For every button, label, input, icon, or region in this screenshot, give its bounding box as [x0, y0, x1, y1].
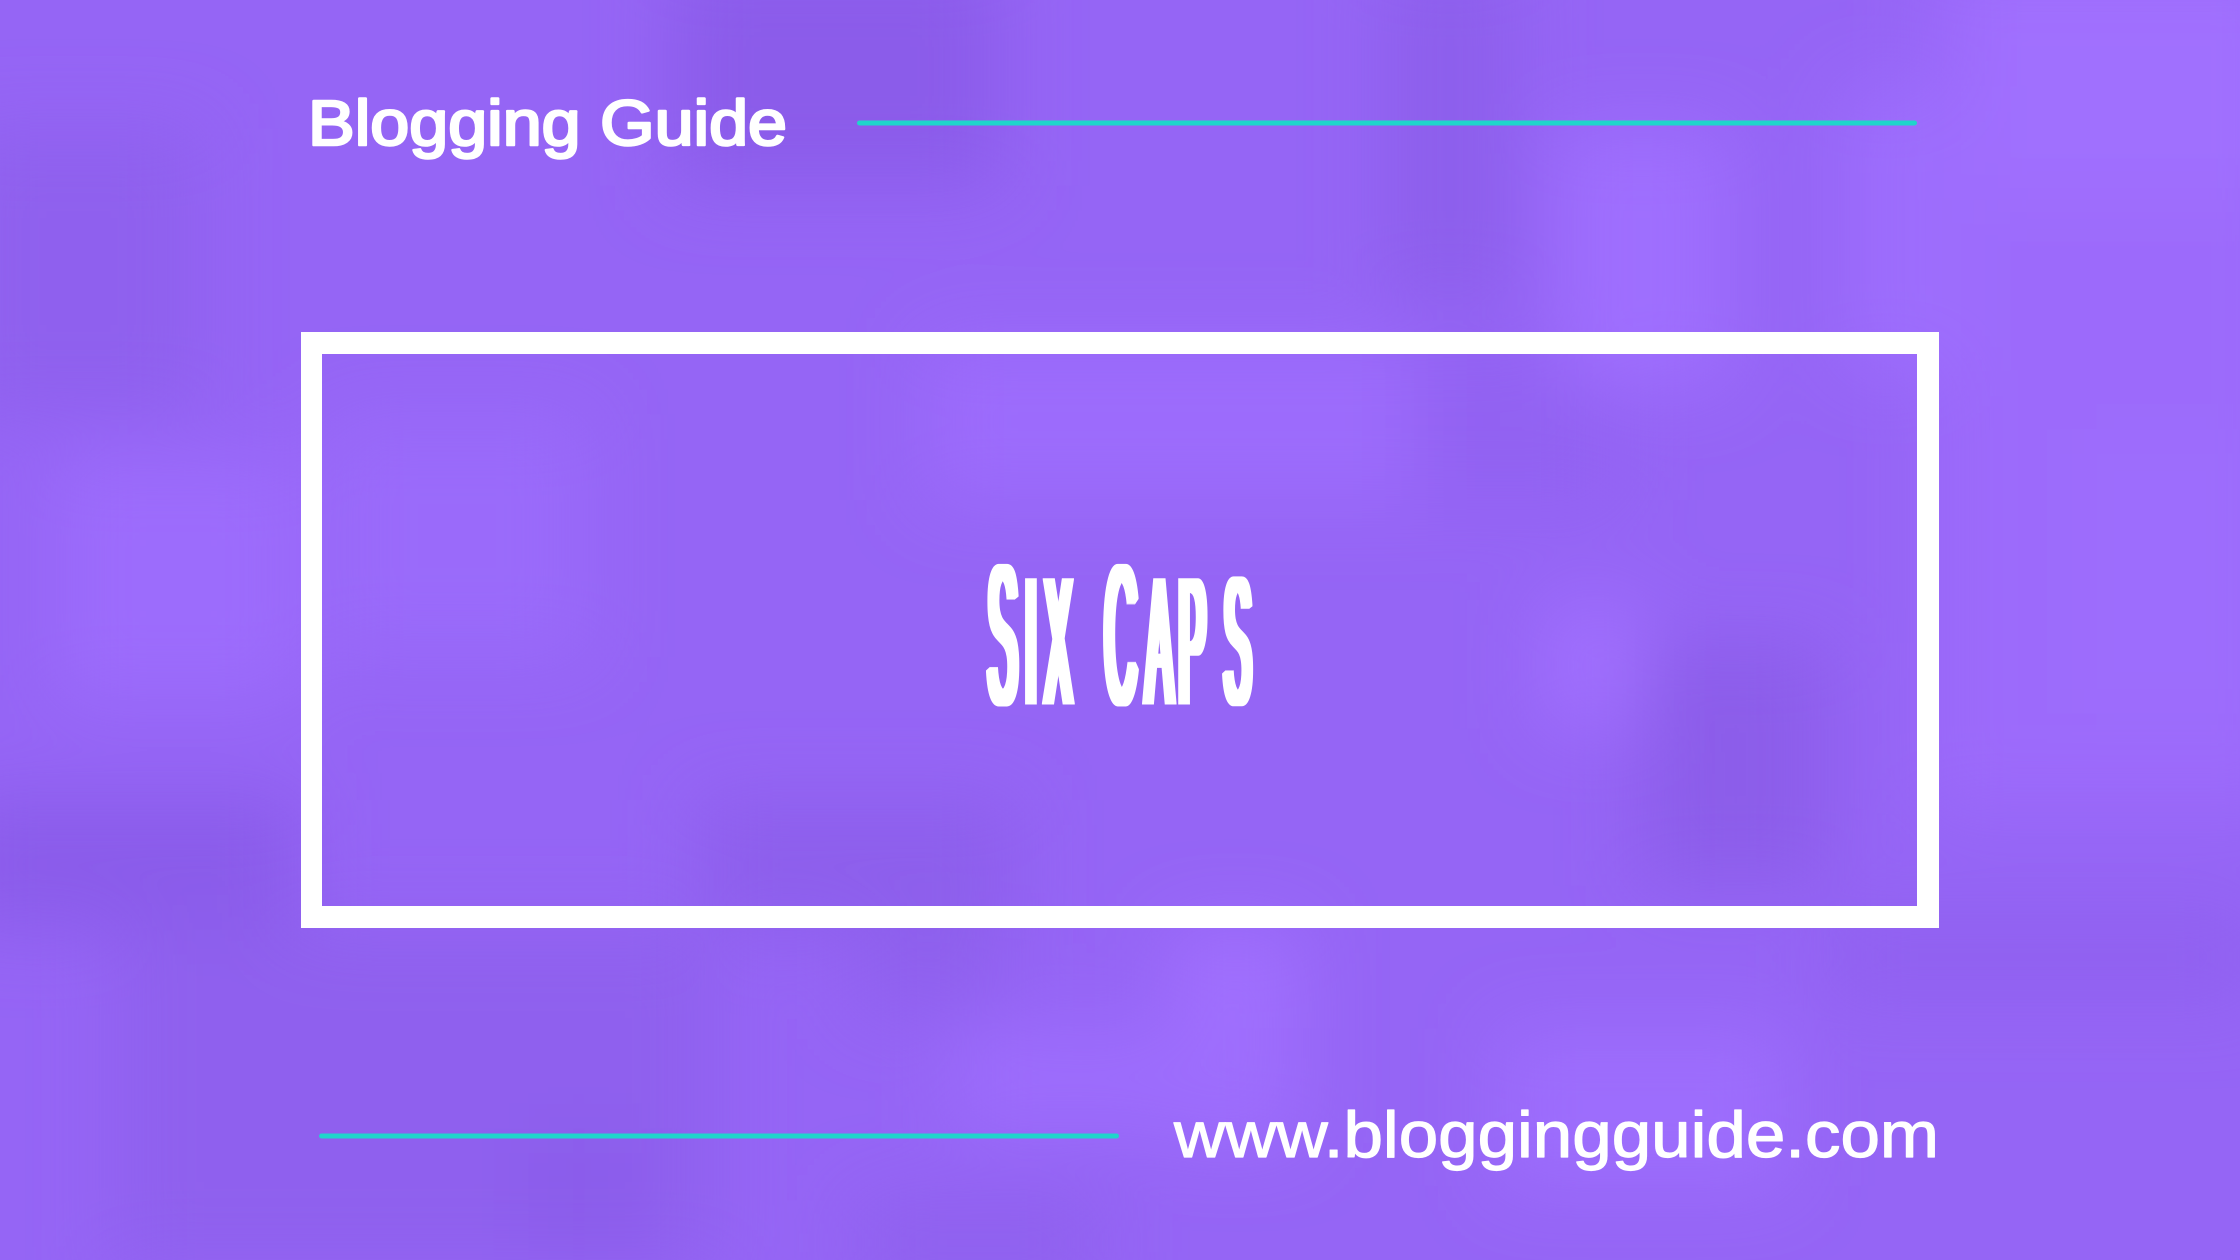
footer url: www.bloggingguide.com [1173, 1098, 1939, 1171]
bottom teal rule [319, 1134, 1119, 1138]
title: Six Caps: S [988, 523, 1017, 747]
title: Six Caps [988, 523, 1251, 747]
top teal rule [857, 120, 1917, 126]
title: Six Caps: IX [1025, 540, 1072, 743]
title: Six Caps: APS [1146, 540, 1251, 743]
heading: Blogging Guide: Blogging Guide [308, 87, 787, 159]
frame border [301, 332, 1939, 928]
title: Six Caps: C [1105, 523, 1137, 747]
